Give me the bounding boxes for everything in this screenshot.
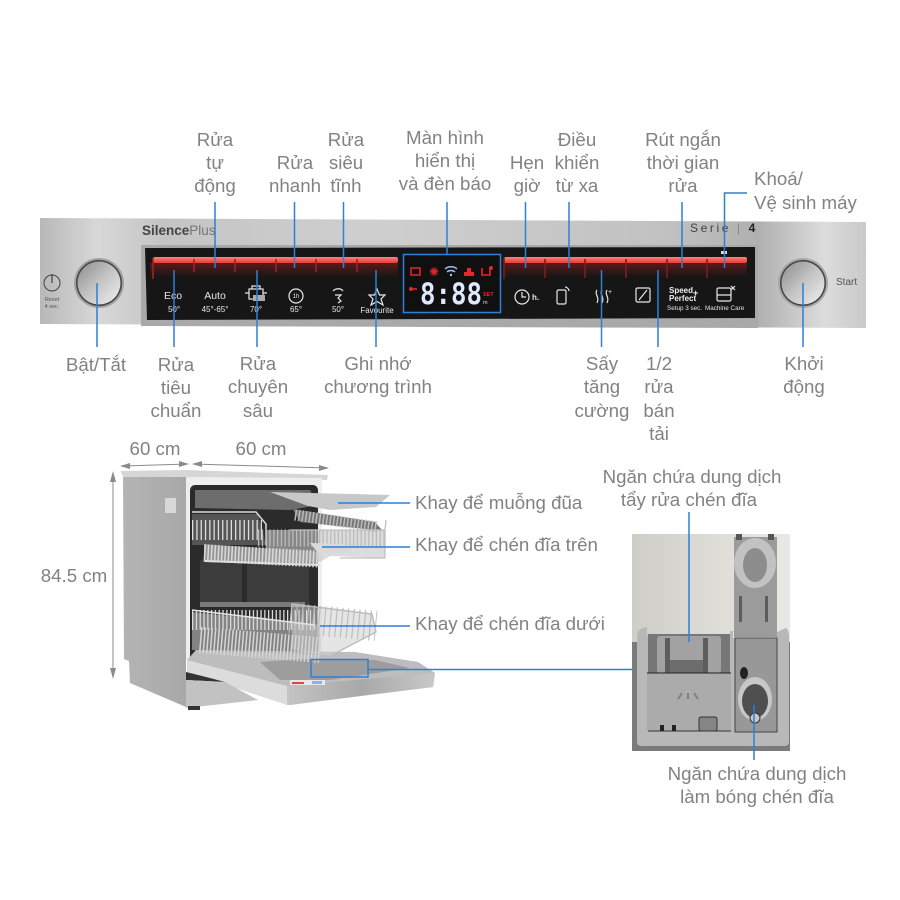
icon: power and reset [44,274,60,310]
callout: Rửa tiêu chuẩn: chuẩn [151,400,201,421]
callout: Ghi nhớ chương trình [324,270,432,397]
dimension: width 60 cm: 60 cm [130,438,180,459]
program: intensive 70: 70° [250,305,262,314]
function: Speed Perfect: + [693,288,698,298]
callout: Rửa chuyên sâu: sâu [243,400,273,421]
callout: Ngăn chứa dung dịch tẩy rửa chén đĩa: Ngăn chứa dung dịch [603,466,781,487]
function: Machine Care: Machine Care [705,305,745,312]
housing [637,627,789,746]
program: Eco: 50° [168,305,180,314]
flap [734,534,777,637]
callout: Rửa nhanh [269,152,321,268]
callout: Sấy tăng cường: tăng [584,376,620,397]
display screen [404,254,500,312]
function: Machine Care [705,286,745,312]
callout: Ngăn chứa dung dịch làm bóng chén đĩa [668,705,846,807]
callout: Ngăn chứa dung dịch tẩy rửa chén đĩa [603,466,781,642]
program: Auto [202,290,228,314]
callout: Bật/Tắt [66,283,127,375]
callout: Rửa siêu tĩnh [328,129,365,268]
callout: Hẹn giờ: Hẹn [510,152,544,173]
dispenser photo [632,534,790,751]
display unit marks: m [483,300,488,306]
callout: Khởi động: động [783,376,825,397]
dimension: height 84.5 cm: 84.5 cm [41,565,107,586]
lower rack [192,604,376,656]
display unit marks [483,292,494,306]
callout: Khoá / Vệ sinh máy: Khoá/ [754,168,804,189]
function: Speed Perfect: Speed [669,286,693,295]
callout: Bật/Tắt: Bật/Tắt [66,354,127,375]
knob: on/off [74,258,124,308]
callout: Sấy tăng cường: cường [575,400,629,421]
callout: link to dispenser [311,660,632,677]
dimension: depth 60 cm [192,438,329,471]
callout: Rửa tiêu chuẩn: tiêu [161,377,191,398]
background [632,534,790,751]
callout: Rút ngắn thời gian rửa: rửa [668,175,698,196]
control panel [40,218,866,328]
callout: Rửa tiêu chuẩn: Rửa [158,354,195,375]
function: Speed Perfect [667,286,702,312]
program: Favourite: Favourite [360,306,394,315]
top rail assembly [195,490,318,510]
callout: Rửa tiêu chuẩn [151,270,201,421]
callout: Rút ngắn thời gian rửa: Rút ngắn [645,129,721,150]
program: silent 50 [332,289,344,314]
brand: Serie 4: Serie | 4 [690,221,758,235]
callout: Khoá / Vệ sinh máy: Vệ sinh máy [754,192,857,213]
callout: Rửa tự động: tự [206,152,224,173]
program: Auto: Auto [204,290,226,302]
side panel [123,477,186,707]
callout: Rửa siêu tĩnh: Rửa [328,129,365,150]
dimension: width 60 cm [120,438,189,469]
dimension: depth 60 cm: 60 cm [236,438,286,459]
callout: Điều khiển từ xa: Điều [558,129,596,150]
callout: Ghi nhớ chương trình: Ghi nhớ [344,353,412,374]
callout: Màn hình hiển thị và đèn báo: và đèn báo [399,173,491,194]
callout: Rửa chuyên sâu [228,270,288,421]
rinse compartment [735,638,777,732]
red light strip: left [153,257,398,279]
display unit marks: SET [483,292,494,298]
callout: Khởi động: Khởi [784,353,824,374]
door panel [187,650,435,705]
dimension: height 84.5 cm [41,471,116,679]
function: Speed Perfect: Setup 3 sec. [667,305,702,312]
program: Auto: 45°-65° [202,305,228,314]
front frame [186,477,322,660]
callout: Ngăn chứa dung dịch làm bóng chén đĩa: Ngăn chứa dung dịch [668,763,846,784]
callout: 1/2 rửa bán tải [643,270,675,444]
icon: power and reset: 4 sec. [45,304,60,310]
program: silent 50: 50° [332,305,344,314]
callout: Khay để chén đĩa trên: Khay để chén đĩa trên [415,534,598,555]
callout: 1/2 rửa bán tải: 1/2 [646,353,672,374]
callout: Khay để muỗng đũa: Khay để muỗng đũa [415,492,583,513]
back wall [200,560,309,607]
side label [165,498,176,513]
function: extra dry [596,289,612,303]
callout: Rút ngắn thời gian rửa [645,129,721,268]
callout: Ngăn chứa dung dịch làm bóng chén đĩa: làm bóng chén đĩa [680,786,834,807]
callout: Màn hình hiển thị và đèn báo: hiển thị [415,150,475,171]
function: extra dry: + [608,289,612,296]
black control strip [145,247,755,320]
callout: Rửa tự động [194,129,236,268]
function: half load [636,288,650,302]
function: remote [557,287,569,304]
callout: Màn hình hiển thị và đèn báo: Màn hình [406,127,484,148]
callout: Rửa tự động: Rửa [197,129,234,150]
function: Speed Perfect: Perfect [669,294,696,303]
program: Favourite [360,289,394,315]
detergent compartment [648,634,730,673]
knob: start [778,258,828,308]
callout: Rửa siêu tĩnh: tĩnh [330,175,362,196]
callout: Khoá / Vệ sinh máy [724,168,857,268]
callout: Rửa chuyên sâu: Rửa [240,353,277,374]
callout: Rửa nhanh: Rửa [277,152,314,173]
label: Start: Start [836,277,857,288]
callout: Màn hình hiển thị và đèn báo [399,127,491,254]
callout: Sấy tăng cường [575,270,629,421]
callout: Khay để chén đĩa dưới: Khay để chén đĩa dưới [415,613,605,634]
callout: Sấy tăng cường: Sấy [586,353,619,374]
callout: Khởi động [783,283,825,397]
icon: power and reset: Reset [45,297,60,303]
program: Eco [164,290,182,314]
function: delay timer: h. [532,293,539,302]
program: intensive 70 [245,286,267,314]
callout: Ngăn chứa dung dịch tẩy rửa chén đĩa: tẩy rửa chén đĩa [621,489,758,510]
callout: Rửa siêu tĩnh: siêu [329,152,363,173]
callout: 1/2 rửa bán tải: tải [649,423,669,444]
red light strip: right [504,251,747,279]
callout: Điều khiển từ xa: khiển [555,152,599,173]
callout: Rửa tự động: động [194,175,236,196]
dishwasher illustration [120,470,435,710]
top cover [120,470,328,483]
callout: Điều khiển từ xa [555,129,599,268]
interior cavity [190,485,318,663]
callout: Hẹn giờ [510,152,544,268]
callout: Hẹn giờ: giờ [514,175,540,196]
callout: Rút ngắn thời gian rửa: thời gian [647,152,719,173]
brand: SilencePlus: SilencePlus [142,223,216,238]
cutlery tray [270,492,390,531]
function: delay timer [515,290,539,304]
callout: 1/2 rửa bán tải: bán [643,400,675,421]
callout: 1/2 rửa bán tải: rửa [644,376,674,397]
upper rack [192,512,386,566]
lid [647,673,731,731]
display status icons: ✺ [429,265,439,279]
base plinth and foot [186,672,258,710]
program: quick 65: 65° [290,305,302,314]
program: quick 65 [289,289,303,314]
callout: Ghi nhớ chương trình: chương trình [324,376,432,397]
callout: Rửa chuyên sâu: chuyên [228,376,288,397]
program: quick 65: 1h [293,294,299,300]
callout: Điều khiển từ xa: từ xa [556,175,599,196]
callout: Rửa nhanh: nhanh [269,175,321,196]
program: Eco: Eco [164,290,182,302]
display digits: 8:88 [420,277,482,311]
